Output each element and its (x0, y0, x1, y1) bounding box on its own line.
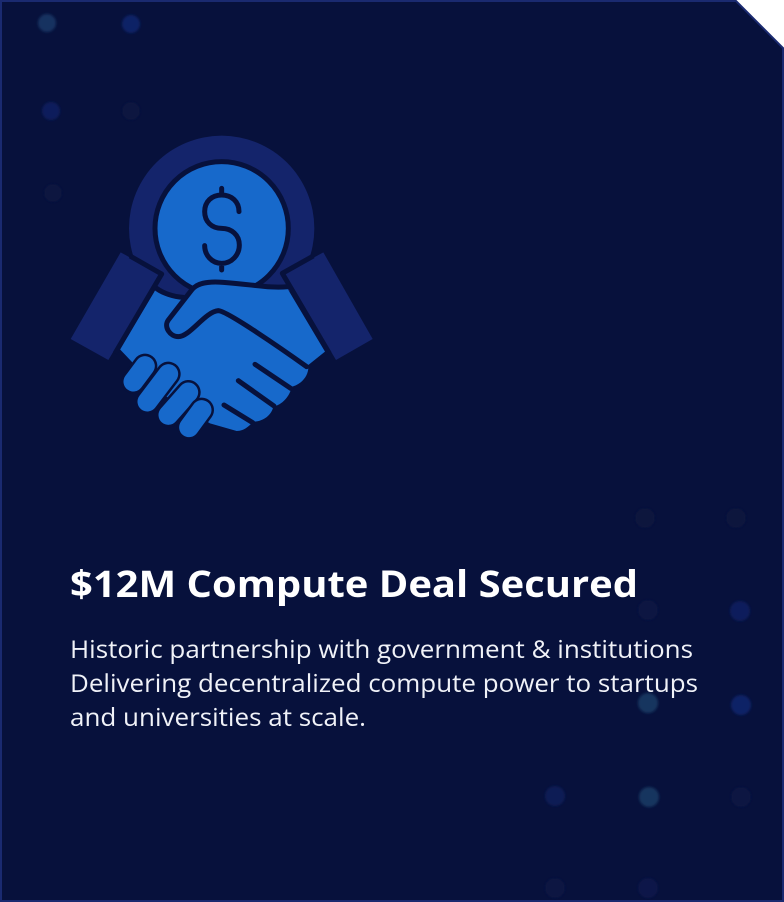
title: $12M Compute Deal Secured (70, 557, 638, 608)
icon: dollar sign (205, 188, 239, 270)
icon: coin (155, 162, 288, 295)
description text: Historic partnership with government & institutions (70, 632, 693, 666)
description text: and universities at scale. (70, 700, 366, 734)
icon: hand outlines (157, 282, 307, 423)
icon: clasped hands (120, 282, 325, 431)
description text: Delivering decentralized compute power to startups (70, 666, 698, 700)
icon: right cuff (282, 252, 373, 360)
icon: fingers (133, 366, 202, 427)
icon: handshake with dollar coin (71, 136, 373, 431)
icon: halo circle (129, 136, 314, 321)
icon: left cuff (71, 252, 162, 360)
description text (70, 632, 698, 734)
